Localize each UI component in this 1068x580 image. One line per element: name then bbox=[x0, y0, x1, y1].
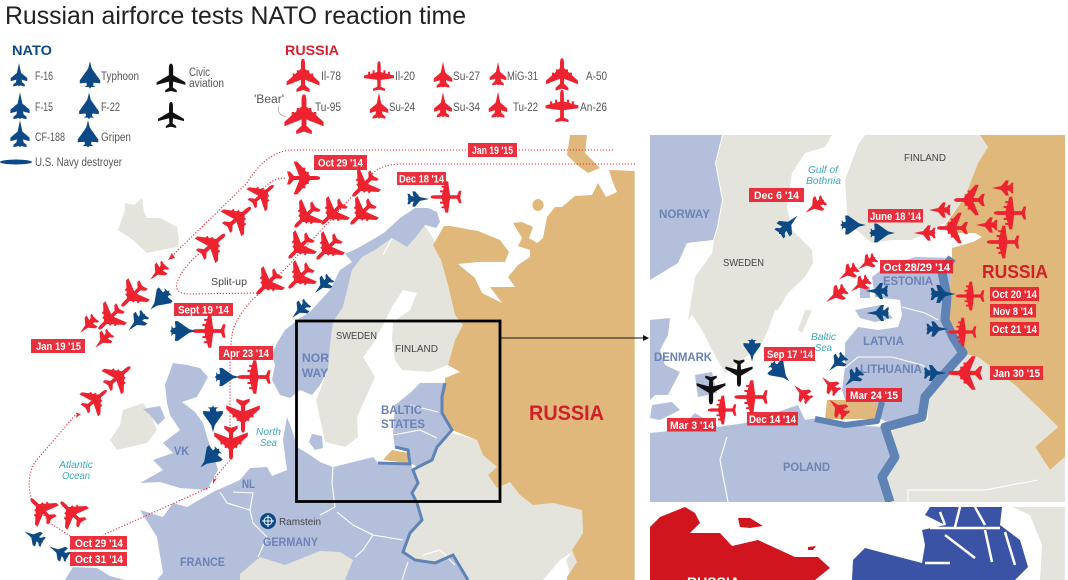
inset labels: ESTONIA bbox=[883, 276, 933, 288]
inset: Finland bbox=[845, 135, 988, 243]
date labels: inset bbox=[667, 188, 1043, 432]
map: Iceland bbox=[118, 198, 179, 253]
icon: Typhoon: Typhoon bbox=[101, 71, 139, 83]
legend: NATO: NATO bbox=[12, 42, 52, 58]
map labels: Atlantic bbox=[58, 459, 94, 471]
date labels: main map: Oct 29 '14 bbox=[75, 538, 124, 550]
icon: Tu-22: Tu-22 bbox=[513, 102, 538, 114]
inset: Gotland bbox=[798, 310, 812, 333]
map labels: Ocean bbox=[62, 470, 90, 482]
icon: civic aviation bbox=[157, 64, 224, 128]
icon: MiG-31: MiG-31 bbox=[507, 71, 538, 83]
map labels: North bbox=[256, 426, 281, 438]
inset: Belarus and Ukraine bbox=[882, 353, 1065, 502]
flight routes bbox=[29, 150, 635, 536]
inset labels: NORWAY bbox=[659, 209, 710, 221]
inset frame bbox=[296, 321, 500, 502]
icon: Ramstein air base: Ramstein bbox=[279, 516, 321, 528]
inset labels: POLAND bbox=[783, 462, 830, 474]
legend: NATO bbox=[0, 42, 224, 169]
map labels: FRANCE bbox=[180, 557, 225, 569]
planes: North Sea and Atlantic route bbox=[20, 355, 271, 534]
map: Austria and Switzerland bbox=[240, 551, 353, 580]
inset labels: DENMARK bbox=[654, 352, 713, 364]
icon: Tu-95: Tu-95 bbox=[315, 102, 341, 114]
icon: Su-34 bbox=[434, 92, 481, 117]
icon: Su-27 bbox=[434, 62, 480, 88]
map: Novaya Zemlya bbox=[567, 135, 600, 173]
inset labels: LITHUANIA bbox=[860, 364, 922, 376]
icon: An-26 bbox=[546, 90, 607, 122]
icon: Il-20 bbox=[364, 61, 415, 91]
inset: Baltic states bbox=[842, 257, 963, 425]
date labels: main map: Oct 31 '14 bbox=[75, 554, 124, 566]
inset: Denmark bbox=[650, 318, 680, 400]
date labels: inset: Oct 20 '14 bbox=[992, 289, 1038, 301]
map: Norway bbox=[272, 208, 440, 398]
icon: Typhoon bbox=[80, 61, 139, 89]
icon: F-15: F-15 bbox=[35, 102, 53, 114]
icon: MiG-31 bbox=[490, 62, 538, 85]
panel: Baltic inset map bbox=[650, 135, 1065, 502]
icon: F-22: F-22 bbox=[101, 102, 120, 114]
inset: Russia bbox=[945, 135, 1065, 470]
date labels: inset: Dec 6 '14 bbox=[754, 190, 800, 202]
main map of northern Europe bbox=[20, 135, 649, 580]
map: Belarus and Ukraine bbox=[403, 433, 583, 580]
map: Baltic Sea and Gulf of Bothnia bbox=[325, 290, 460, 467]
icon: civic aviation: aviation bbox=[189, 78, 224, 90]
inset: NATO eastern border bbox=[815, 258, 963, 502]
icon: CF-188: CF-188 bbox=[35, 132, 65, 144]
inset labels: LATVIA bbox=[863, 336, 904, 348]
icon: U.S. Navy destroyer: U.S. Navy destroyer bbox=[35, 157, 122, 169]
map labels: WAY bbox=[302, 368, 328, 380]
map: Spain fragment bbox=[65, 567, 125, 580]
icon: U.S. Navy destroyer bbox=[0, 157, 122, 169]
inset: Saaremaa bbox=[855, 305, 893, 322]
map labels: VK bbox=[174, 446, 190, 458]
map labels: Sea bbox=[260, 437, 277, 449]
planes: northern route bbox=[75, 162, 461, 353]
map labels bbox=[58, 276, 604, 569]
inset planes: NATO bbox=[744, 209, 956, 391]
icon: F-22 bbox=[79, 93, 120, 119]
icon: Su-24: Su-24 bbox=[389, 102, 416, 114]
inset: Hiiumaa bbox=[860, 286, 870, 298]
inset labels: FINLAND bbox=[904, 152, 946, 164]
inset labels: Sea bbox=[815, 342, 832, 354]
map: UK bbox=[140, 363, 218, 490]
map: Ireland bbox=[110, 403, 157, 450]
Arctic: Greenland bbox=[1012, 507, 1065, 580]
map labels: NOR bbox=[302, 353, 330, 365]
inset: German coast islands bbox=[650, 402, 680, 420]
date labels: inset: Nov 8 '14 bbox=[993, 306, 1034, 318]
legend: Russia bbox=[254, 42, 607, 134]
arrow to inset bbox=[500, 335, 649, 341]
icon: Tu-95 bbox=[284, 94, 341, 134]
inset: Kaliningrad bbox=[825, 400, 878, 419]
inset: Danish islands bbox=[695, 372, 717, 397]
map: continental Europe bbox=[140, 417, 468, 580]
icon: CF-188 bbox=[10, 120, 65, 147]
planes: NATO interceptors on the main map bbox=[21, 191, 429, 564]
map: Northern Ireland bbox=[143, 406, 165, 425]
icon: Su-27: Su-27 bbox=[453, 71, 480, 83]
date labels: inset: Sep 17 '14 bbox=[767, 349, 814, 361]
date labels: main map: Dec 18 '14 bbox=[399, 174, 445, 186]
title: Russian airforce tests NATO reaction time bbox=[5, 2, 466, 30]
legend: Russia: RUSSIA bbox=[285, 42, 339, 58]
inset labels bbox=[654, 152, 1048, 474]
map: Baltic states bbox=[393, 383, 452, 467]
icon: Il-20: Il-20 bbox=[395, 71, 415, 83]
icon: civic aviation: Civic bbox=[189, 67, 210, 79]
map labels: BALTIC bbox=[381, 405, 422, 417]
date labels: inset: Mar 3 '14 bbox=[670, 420, 715, 432]
date labels: main map: Jan 19 '15 bbox=[36, 341, 81, 353]
icon: F-16 bbox=[11, 63, 53, 86]
date labels: main map: Apr 23 '14 bbox=[223, 348, 270, 360]
inset: Sweden bbox=[688, 135, 832, 373]
date labels: inset: Oct 28/29 '14 bbox=[883, 262, 951, 274]
inset labels: Gulf of bbox=[808, 164, 839, 176]
icon: Ramstein air base bbox=[260, 513, 321, 529]
date labels: main map: Jan 19 '15 bbox=[472, 145, 513, 157]
icon: Il-78 bbox=[287, 59, 341, 92]
map: Kolguyev island bbox=[532, 199, 544, 211]
map labels: STATES bbox=[381, 419, 425, 431]
Bear note bbox=[254, 94, 286, 117]
icon: An-26: An-26 bbox=[580, 102, 607, 114]
inset planes: civic aviation bbox=[697, 359, 753, 404]
date labels: inset: Oct 21 '14 bbox=[992, 324, 1038, 336]
icon: Su-24 bbox=[370, 93, 416, 119]
icon: F-16: F-16 bbox=[35, 71, 53, 83]
date labels: inset: Dec 14 '14 bbox=[749, 414, 797, 426]
inset labels: Bothnia bbox=[806, 175, 841, 187]
map labels: SWEDEN bbox=[336, 330, 377, 342]
date labels: inset: Jan 30 '15 bbox=[993, 368, 1040, 380]
icon: F-15 bbox=[10, 92, 53, 119]
map labels: GERMANY bbox=[263, 537, 318, 549]
inset labels: RUSSIA bbox=[982, 262, 1048, 282]
icon: Su-34: Su-34 bbox=[453, 102, 481, 114]
map labels: FINLAND bbox=[395, 343, 438, 355]
icon: Il-78: Il-78 bbox=[321, 71, 341, 83]
inset planes: Russia bbox=[708, 180, 1026, 424]
map labels: NL bbox=[242, 479, 255, 491]
inset labels: SWEDEN bbox=[723, 257, 764, 269]
date labels: main map bbox=[31, 143, 517, 566]
Arctic: Canada bbox=[852, 507, 1028, 580]
icon: A-50: A-50 bbox=[586, 71, 607, 83]
map: Crimea sea notch bbox=[543, 547, 580, 580]
inset: Germany and Poland bbox=[650, 405, 895, 502]
map labels: Split-up bbox=[211, 276, 247, 288]
map labels: RUSSIA bbox=[529, 402, 604, 425]
panel: Arctic comparison map bbox=[650, 507, 1065, 580]
Bear note: 'Bear' bbox=[254, 94, 284, 106]
date labels: main map: Oct 29 '14 bbox=[318, 158, 364, 170]
map: Danish islands bbox=[309, 434, 323, 450]
map: Kattegat bbox=[295, 395, 328, 457]
inset labels: Baltic bbox=[811, 331, 837, 343]
date labels: main map: Sept 19 '14 bbox=[178, 304, 230, 316]
map: Sweden and Finland bbox=[316, 223, 463, 450]
map: Russia bbox=[433, 170, 635, 580]
icon: A-50 bbox=[546, 58, 607, 91]
date labels: inset: June 18 '14 bbox=[870, 211, 922, 223]
inset: Norway bbox=[650, 135, 722, 280]
icon: Tu-22 bbox=[489, 92, 538, 118]
Arctic: Russia bbox=[650, 507, 830, 580]
NATO eastern border bbox=[378, 383, 468, 580]
icon: Gripen: Gripen bbox=[101, 132, 131, 144]
map: Kaliningrad bbox=[383, 450, 408, 463]
date labels: inset: Mar 24 '15 bbox=[850, 390, 898, 402]
icon: Gripen bbox=[78, 120, 131, 148]
